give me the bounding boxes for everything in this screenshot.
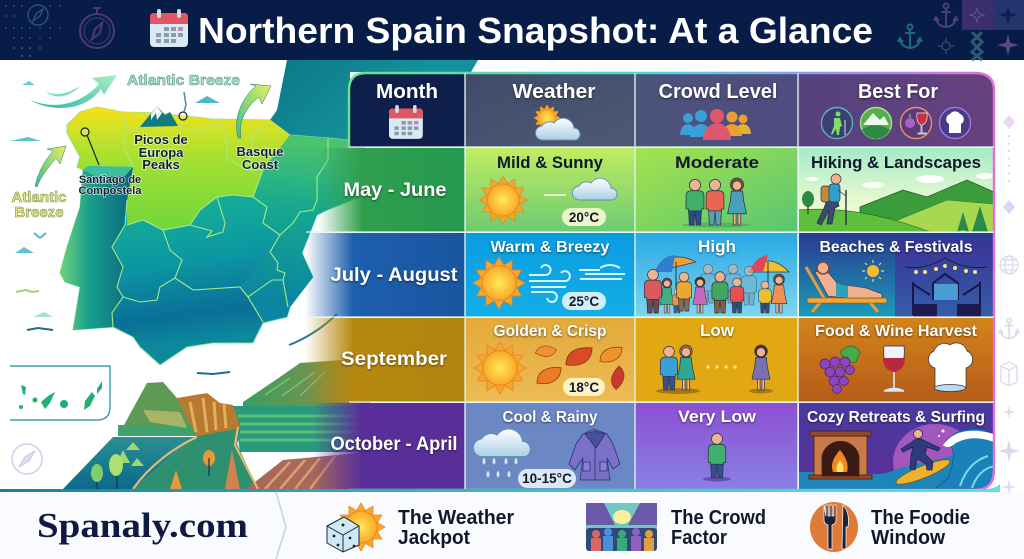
crowd cell: [635, 148, 798, 232]
landscape: southern fields: [63, 358, 370, 490]
weather cell: Mild & Sunny: [497, 153, 604, 172]
weather cell: 18°C: [569, 380, 599, 395]
icon: globe: [1000, 256, 1018, 274]
arrow: west Atlantic: [35, 146, 66, 187]
icon: sparkle: [1002, 405, 1016, 419]
label: September: [341, 349, 448, 370]
item: The Weather Jackpot: The Weather: [398, 507, 514, 529]
label: Picos de Europa Peaks: Picos de: [134, 132, 188, 147]
chef hat: [928, 343, 973, 392]
column: Crowd Level header: [635, 73, 798, 147]
lower right stripes: [246, 452, 370, 489]
icon: title calendar: [150, 9, 188, 47]
weather cell: 25°C: [569, 294, 599, 309]
label: Picos de Europa Peaks: Europa: [139, 145, 184, 160]
string lights: [905, 258, 987, 274]
Galicia coast inlet: [83, 166, 133, 176]
green striped fields: [233, 406, 370, 452]
row: July - August: [305, 233, 994, 317]
umbrellas: [655, 255, 789, 300]
month cell: [305, 318, 465, 402]
olive terrace hill: [118, 382, 197, 436]
column: Month header: [349, 73, 465, 147]
dotted line: [1008, 135, 1010, 182]
month cell: [312, 403, 465, 489]
forest hill: [63, 437, 193, 489]
France landmass: [270, 60, 478, 147]
item: The Crowd Factor: [586, 503, 766, 551]
eastern regions: [240, 135, 365, 322]
foam dots: [938, 430, 944, 437]
column: Month header: Month: [376, 81, 438, 103]
weather cell: [465, 233, 635, 317]
item: The Weather Jackpot: [327, 503, 514, 552]
hiker: [817, 174, 846, 225]
icon: anchor: [999, 318, 1019, 338]
knot pattern: [972, 32, 982, 60]
icon: teal anchor: [898, 24, 922, 48]
surfer: [901, 430, 940, 470]
label: July - August: [330, 265, 458, 286]
upper green hills: [243, 358, 370, 406]
best for cell: [799, 403, 993, 489]
icon: map book: [1001, 362, 1017, 386]
row: October - April: [314, 403, 993, 489]
sun: [862, 260, 884, 282]
label: Atlantic Breeze top: Atlantic Breeze: [127, 72, 240, 89]
label: Atlantic Breeze left: Atlantic: [11, 189, 67, 206]
best for cell: [798, 233, 994, 317]
roads: [133, 427, 258, 489]
weather cell: [465, 148, 635, 232]
northern lime regions: [67, 107, 290, 230]
icon: star: [998, 440, 1020, 462]
month cell: [318, 148, 465, 232]
Portugal: [60, 167, 133, 330]
region borders: [112, 112, 328, 327]
icon: gear: [938, 38, 954, 54]
icon: diamond: [1003, 115, 1015, 129]
heading: Hiking & Landscapes: Hiking & Landscapes: [811, 154, 981, 172]
item: The Foodie Window: The Foodie: [871, 507, 970, 529]
header band: [0, 0, 1024, 60]
icon: purple star: [997, 34, 1019, 56]
column: Weather header: [465, 73, 635, 147]
item: The Crowd Factor: Factor: [671, 527, 727, 549]
label: Basque Coast: Basque: [237, 144, 283, 159]
Picos de Europa peaks: [140, 106, 178, 127]
weather cell: 20°C: [569, 210, 599, 225]
icon: map compass: [12, 444, 42, 474]
weather cell: [465, 318, 635, 402]
item: The Weather Jackpot: Jackpot: [398, 527, 470, 549]
Santiago pin: [81, 128, 99, 165]
header dot pattern: [5, 5, 61, 57]
label: Picos de Europa Peaks: Peaks: [142, 157, 180, 172]
weather cell: 10-15°C: [522, 471, 572, 486]
title: Northern Spain Snapshot: At a Glance: [198, 10, 873, 51]
icon: wine badge: [900, 108, 932, 138]
wave: [935, 429, 994, 489]
table: [305, 73, 994, 500]
best for cell: [798, 318, 994, 402]
right margin decorations: [998, 115, 1020, 495]
weather cell: Golden & Crisp: [494, 323, 607, 340]
brand: Spanaly.com: [37, 506, 248, 545]
festival stage: [913, 274, 981, 317]
label: Santiago de Compostela: Santiago de: [79, 174, 141, 186]
crowd cell: [635, 318, 798, 402]
label: May - June: [344, 180, 446, 201]
sea clouds and waves: [10, 81, 337, 374]
trees: [91, 442, 240, 490]
map: Iberia: [10, 60, 478, 374]
item: The Foodie Window: [810, 502, 970, 552]
crowd cell: Very Low: [678, 407, 757, 426]
crowd cell: Moderate: [675, 153, 759, 172]
best for cell: Cozy Retreats & Surfing: [807, 409, 985, 426]
orange striped field: [177, 393, 241, 437]
inset: Canary Islands: [10, 366, 110, 420]
raincoat: [569, 429, 620, 480]
icon: mountain badge: [860, 108, 892, 139]
weather cell: [465, 403, 635, 489]
best for cell: Beaches & Festivals: [820, 239, 973, 256]
icon: lower diamond: [1003, 200, 1015, 214]
month cell: [305, 233, 465, 317]
best for cell: Food & Wine Harvest: [815, 323, 978, 340]
label: Atlantic Breeze left: Breeze: [14, 204, 64, 221]
islands: [19, 381, 102, 410]
icon: chef hat badge: [940, 108, 970, 138]
arrow: Basque coast: [236, 84, 271, 138]
icon: small compass: [28, 5, 48, 25]
table border: [306, 73, 994, 490]
rain drops: [482, 457, 518, 478]
chevron divider: [276, 492, 286, 559]
small swoosh: [46, 86, 80, 96]
icon: crowd: [680, 109, 751, 140]
column: Crowd Level header: Crowd Level: [658, 81, 778, 103]
column: Best For header: Best For: [858, 81, 938, 103]
label: Basque Coast: Coast: [242, 157, 279, 172]
column: Weather header: Weather: [512, 81, 596, 103]
Spain mainland: [60, 107, 365, 365]
icon: hiker badge: [822, 108, 852, 138]
Picos pin: [179, 92, 187, 120]
weather cell: Warm & Breezy: [490, 239, 610, 256]
central hill: [133, 428, 258, 489]
label: October - April: [330, 434, 458, 455]
crowd cell: [635, 403, 798, 489]
row: September: [305, 318, 994, 402]
decorative corner squares: [962, 0, 1024, 30]
crowd cell: [635, 233, 798, 317]
icon: purple anchor: [934, 4, 958, 27]
label: Santiago de Compostela: Compostela: [79, 185, 142, 197]
arrow: top left swoosh: [30, 75, 117, 108]
surfboard: [896, 459, 950, 485]
grid lines: [306, 73, 994, 490]
column: Best For header: [798, 73, 994, 147]
grapes: [820, 346, 860, 394]
weather cell: Cool & Rainy: [502, 409, 598, 426]
lounger and sunbather: [806, 262, 887, 312]
crowd cell: High: [698, 237, 736, 256]
item: The Foodie Window: Window: [871, 527, 945, 549]
wine glass: [883, 346, 905, 391]
footer strip: [0, 484, 1024, 559]
best for cell: [798, 148, 994, 232]
leaves: [535, 342, 629, 390]
row: May - June: [318, 148, 994, 232]
icon: small star: [1001, 479, 1017, 495]
item: The Crowd Factor: The Crowd: [671, 507, 766, 529]
icon: large compass: [80, 8, 114, 48]
fireplace: [809, 431, 872, 479]
crowd cell: Low: [700, 321, 735, 340]
